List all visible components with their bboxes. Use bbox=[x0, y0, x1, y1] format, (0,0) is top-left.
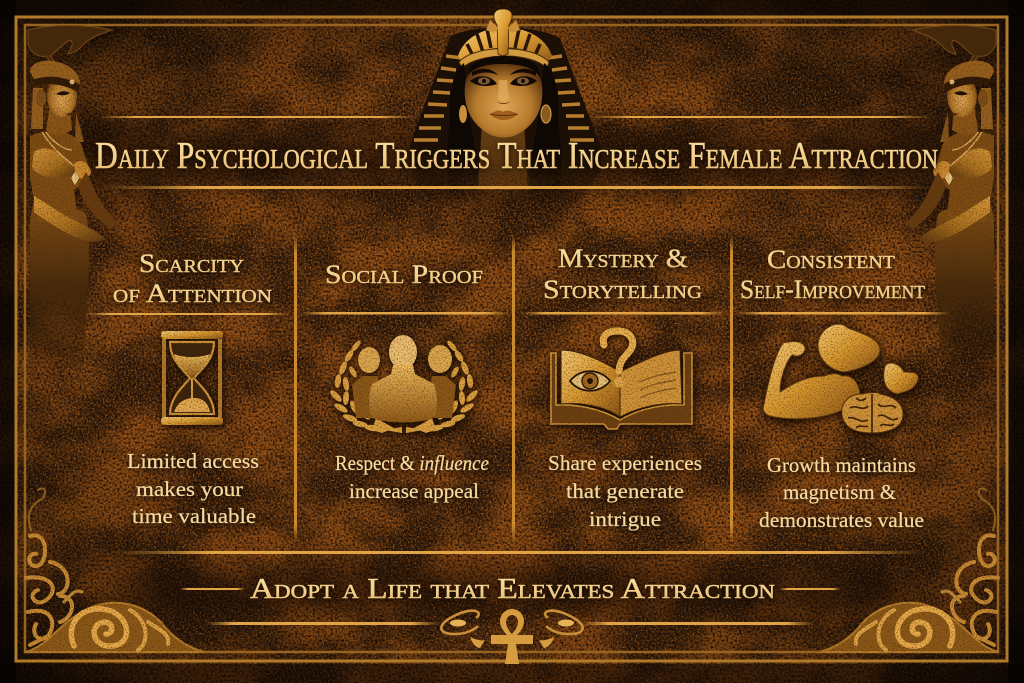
description bbox=[759, 453, 924, 532]
description: that generate bbox=[566, 479, 684, 503]
panel: scarcity of attention bbox=[85, 249, 290, 528]
heading bbox=[740, 245, 925, 304]
nose bbox=[498, 80, 509, 101]
gold crown band bbox=[458, 29, 552, 61]
hair bbox=[448, 63, 561, 177]
heading: of Attention bbox=[113, 279, 272, 308]
brows bbox=[472, 69, 536, 76]
heading: Storytelling bbox=[543, 275, 702, 304]
description: Limited access bbox=[127, 449, 259, 473]
lips bbox=[490, 111, 518, 120]
eyes bbox=[470, 76, 537, 86]
heading: Mystery & bbox=[558, 244, 688, 273]
rule above title bbox=[98, 116, 930, 118]
icon: people in laurel wreath bbox=[329, 335, 479, 433]
description: Respect & influence bbox=[335, 451, 489, 475]
tagline with dashes: Adopt a Life that Elevates Attraction bbox=[250, 573, 775, 605]
rule above tagline bbox=[115, 551, 925, 554]
description bbox=[548, 451, 702, 531]
icon: muscle, hearts and brain bbox=[763, 324, 918, 433]
heading: Consistent bbox=[767, 245, 895, 274]
header rule bbox=[736, 312, 950, 314]
description: makes your bbox=[136, 477, 243, 501]
corner ornament: bottom left bbox=[25, 488, 204, 652]
header rule bbox=[520, 312, 726, 314]
icon: open book with eye and question mark bbox=[551, 331, 692, 429]
cobra uraeus bbox=[486, 9, 520, 56]
heading: Self-Improvement bbox=[740, 275, 925, 304]
earrings bbox=[459, 105, 467, 123]
eye scrolls bbox=[441, 611, 583, 634]
heading: Social Proof bbox=[325, 260, 483, 289]
rule with ankh emblem bbox=[205, 609, 815, 664]
heading bbox=[113, 249, 272, 308]
description: increase appeal bbox=[349, 479, 479, 503]
header rule bbox=[300, 312, 510, 314]
description bbox=[335, 451, 489, 503]
description: time valuable bbox=[132, 504, 256, 528]
description: Share experiences bbox=[548, 451, 702, 475]
face bbox=[465, 64, 542, 138]
nemes headdress bbox=[409, 27, 601, 215]
rule below title bbox=[103, 186, 933, 189]
header rule bbox=[85, 313, 290, 315]
column dividers bbox=[294, 234, 733, 544]
panel: consistent self-improvement bbox=[736, 245, 950, 532]
neck bbox=[478, 129, 528, 190]
statue: right guardian bbox=[904, 26, 996, 372]
icon: ankh bbox=[470, 609, 554, 664]
description: magnetism & bbox=[783, 480, 896, 504]
description: Growth maintains bbox=[767, 453, 916, 477]
description bbox=[127, 449, 259, 528]
statue: left guardian bbox=[28, 26, 120, 372]
heading bbox=[543, 244, 702, 304]
pharaoh portrait bbox=[409, 9, 601, 215]
icon: hourglass bbox=[161, 331, 223, 425]
description: demonstrates value bbox=[759, 508, 924, 532]
corner ornament: bottom right bbox=[820, 488, 999, 652]
description: intrigue bbox=[589, 507, 661, 531]
heading: Scarcity bbox=[139, 249, 244, 278]
panel: social proof bbox=[300, 260, 510, 503]
panel: mystery and storytelling bbox=[520, 244, 726, 531]
